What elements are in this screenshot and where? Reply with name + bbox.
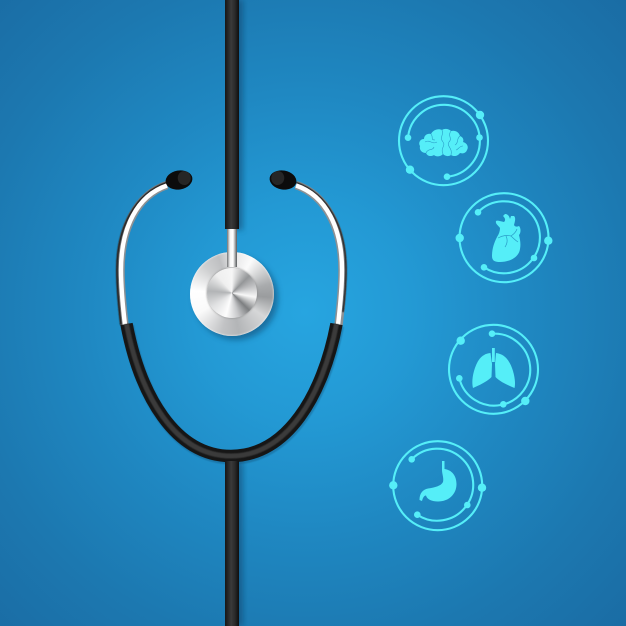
upper black tube: [225, 0, 239, 229]
U-shaped black tube: [126, 324, 338, 458]
chest piece shadow: [194, 256, 278, 340]
lungs icon group: [449, 325, 538, 414]
brain icon group: [399, 96, 488, 185]
ring inner arc: [478, 201, 540, 273]
tube shadows: [234, 0, 243, 626]
ring outer: [449, 325, 538, 414]
icon: stomach: [420, 461, 456, 502]
icon: brain: [419, 129, 468, 156]
ring inner arc: [412, 449, 473, 521]
right metal ear tube: [296, 182, 346, 325]
heart icon group: [456, 193, 552, 282]
stethoscope: [115, 0, 348, 626]
metal stem: [227, 229, 237, 267]
icon: heart: [492, 214, 520, 262]
left metal ear tube: [117, 182, 167, 325]
left ear tip: [164, 168, 194, 192]
icon: lungs: [472, 348, 515, 388]
ring outer: [460, 193, 548, 282]
stomach icon group: [389, 441, 486, 530]
ring inner arc: [459, 334, 530, 406]
lower black tube: [225, 461, 239, 626]
ring outer: [399, 96, 488, 185]
right ear tip: [268, 168, 298, 192]
ring inner arc: [408, 105, 480, 177]
chest piece inner diaphragm: [206, 268, 256, 318]
ring outer: [393, 441, 482, 530]
chest piece outer disc: [190, 252, 274, 336]
